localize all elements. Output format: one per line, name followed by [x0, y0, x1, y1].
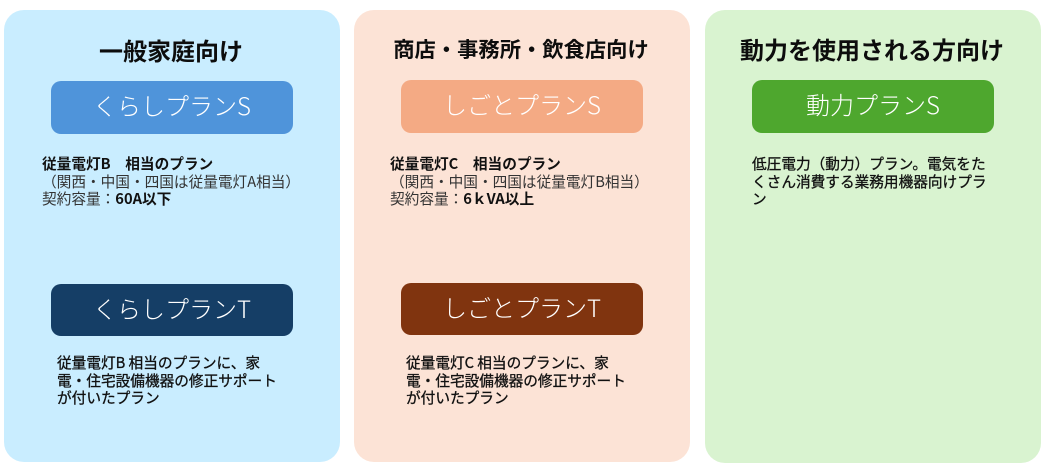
text: Kurashi S description: 従量電灯B 相当のプラン: [42, 153, 213, 174]
text: Shigoto T description: [406, 352, 626, 408]
plan button: Shigoto T: しごとプランT: [443, 289, 601, 324]
text: Kurashi T description: [57, 352, 277, 408]
plan button: Kurashi S: [51, 81, 293, 134]
text: Shigoto S description: [390, 153, 649, 209]
heading: household: 一般家庭向け: [99, 32, 243, 67]
text: Doryoku S description: くさん消費する業務用機器向けプラ: [752, 170, 987, 192]
text: Kurashi T description: 従量電灯B 相当のプランに、家: [57, 352, 260, 373]
panel: power users: [705, 10, 1041, 463]
plan button: Doryoku S: 動力プランS: [806, 86, 940, 121]
plan button: Shigoto S: しごとプランS: [443, 86, 601, 121]
plan button: Shigoto T: [401, 283, 643, 335]
text: Kurashi T description: が付いたプラン: [57, 387, 160, 408]
text: Shigoto S description: 従量電灯C 相当のプラン: [390, 153, 561, 174]
plan button: Kurashi T: [51, 284, 293, 336]
text: Doryoku S description: [752, 153, 987, 209]
panel: household: [4, 10, 340, 462]
text: Shigoto S description: （関西・中国・四国は従量電灯B相当）: [390, 171, 649, 192]
text: Shigoto T description: 従量電灯C 相当のプランに、家: [406, 352, 609, 373]
text: Doryoku S description: ン: [752, 188, 767, 209]
text: Kurashi T description: 電・住宅設備機器の修正サポート: [57, 370, 277, 390]
heading: business: 商店・事務所・飲食店向け: [393, 33, 649, 64]
plan button: Doryoku S: [752, 80, 994, 133]
panel: business: [354, 10, 690, 462]
text: Shigoto T description: が付いたプラン: [406, 387, 509, 408]
text: Kurashi S description: [42, 153, 300, 209]
text: Doryoku S description: 低圧電力（動力）プラン。電気をた: [752, 153, 986, 174]
heading: power users: 動力を使用される方向け: [740, 31, 1004, 66]
plan button: Kurashi S: くらしプランS: [93, 87, 251, 122]
plan button: Kurashi T: くらしプランT: [93, 290, 251, 325]
text: Kurashi S description: 契約容量：60A以下: [42, 188, 171, 209]
text: Kurashi S description: （関西・中国・四国は従量電灯A相当）: [42, 171, 300, 192]
plan button: Shigoto S: [401, 80, 643, 133]
text: Shigoto S description: 契約容量：6ｋVA以上: [390, 188, 534, 209]
text: Shigoto T description: 電・住宅設備機器の修正サポート: [406, 370, 626, 390]
